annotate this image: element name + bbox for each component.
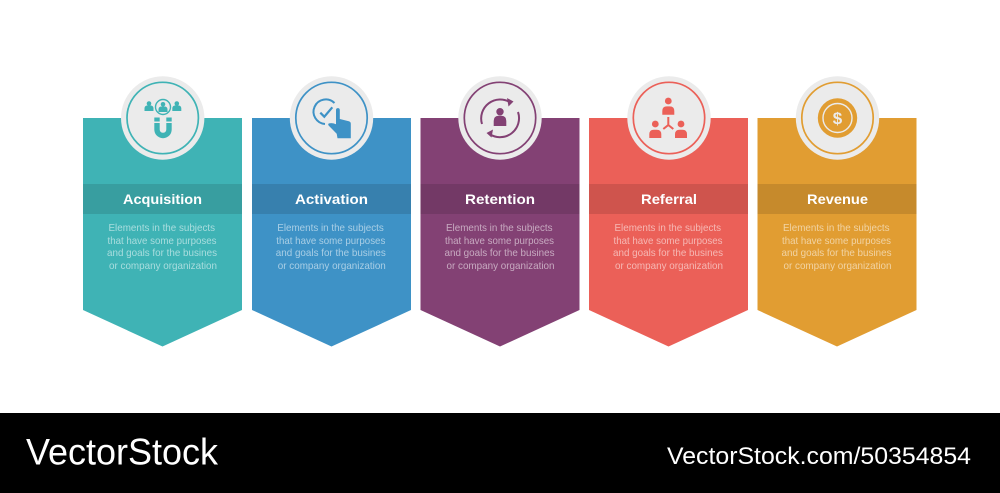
heading: revenue: Revenue — [807, 191, 868, 207]
text block: revenue: and goals for the busines — [782, 247, 892, 259]
icon badge: retention — [458, 76, 542, 160]
text block: acquisition: and goals for the busines — [107, 247, 217, 259]
text block: retention: or company organization — [446, 260, 555, 272]
panel: acquisition — [83, 76, 242, 347]
footer brand: VectorStock — [26, 432, 218, 472]
icon badge: acquisition — [121, 76, 204, 160]
text block: activation: Elements in the subjects — [277, 222, 384, 234]
panel shape: acquisition — [83, 118, 242, 346]
text block: activation: and goals for the busines — [276, 247, 386, 259]
text block: revenue — [782, 222, 892, 272]
text block: revenue: that have some purposes — [782, 235, 891, 247]
text block: referral: or company organization — [615, 260, 723, 272]
heading band: retention — [420, 184, 580, 214]
heading: retention: Retention — [465, 191, 535, 207]
text block: revenue: Elements in the subjects — [783, 222, 890, 234]
panel shape: revenue — [758, 118, 916, 346]
text block: activation: that have some purposes — [276, 235, 385, 247]
icon badge: activation — [290, 76, 373, 160]
text block: revenue: or company organization — [784, 260, 892, 272]
heading: referral: Referral — [641, 191, 697, 207]
icon badge: revenue: $ — [833, 109, 843, 128]
text block: retention: and goals for the busines — [444, 247, 554, 259]
heading: acquisition: Acquisition — [123, 191, 202, 207]
panel: retention — [420, 76, 580, 347]
text block: retention: that have some purposes — [445, 235, 554, 247]
text block: referral: that have some purposes — [614, 235, 722, 247]
heading band: revenue — [758, 184, 916, 214]
heading band: acquisition — [83, 184, 242, 214]
panel: revenue — [758, 76, 916, 347]
text block: referral — [613, 222, 723, 272]
text block: acquisition: or company organization — [109, 260, 217, 272]
footer url: VectorStock.com/50354854 — [667, 443, 971, 470]
text block: retention — [444, 222, 555, 272]
icon badge: revenue — [796, 76, 879, 160]
panel: referral — [589, 76, 748, 347]
panel: activation — [252, 76, 411, 347]
heading: activation: Activation — [295, 191, 368, 207]
text block: activation: or company organization — [278, 260, 386, 272]
text block: referral: and goals for the busines — [613, 247, 723, 259]
heading band: activation — [252, 184, 411, 214]
text block: acquisition: Elements in the subjects — [108, 222, 215, 234]
text block: acquisition — [107, 222, 217, 272]
footer bar — [0, 413, 1000, 493]
panel shape: activation — [252, 118, 411, 346]
text block: retention: Elements in the subjects — [446, 222, 552, 234]
panel shape: referral — [589, 118, 748, 346]
heading band: referral — [589, 184, 748, 214]
text block: referral: Elements in the subjects — [614, 222, 721, 234]
text block: activation — [276, 222, 386, 272]
panel shape: retention — [420, 118, 580, 346]
text block: acquisition: that have some purposes — [108, 235, 216, 247]
icon badge: referral — [627, 76, 711, 160]
